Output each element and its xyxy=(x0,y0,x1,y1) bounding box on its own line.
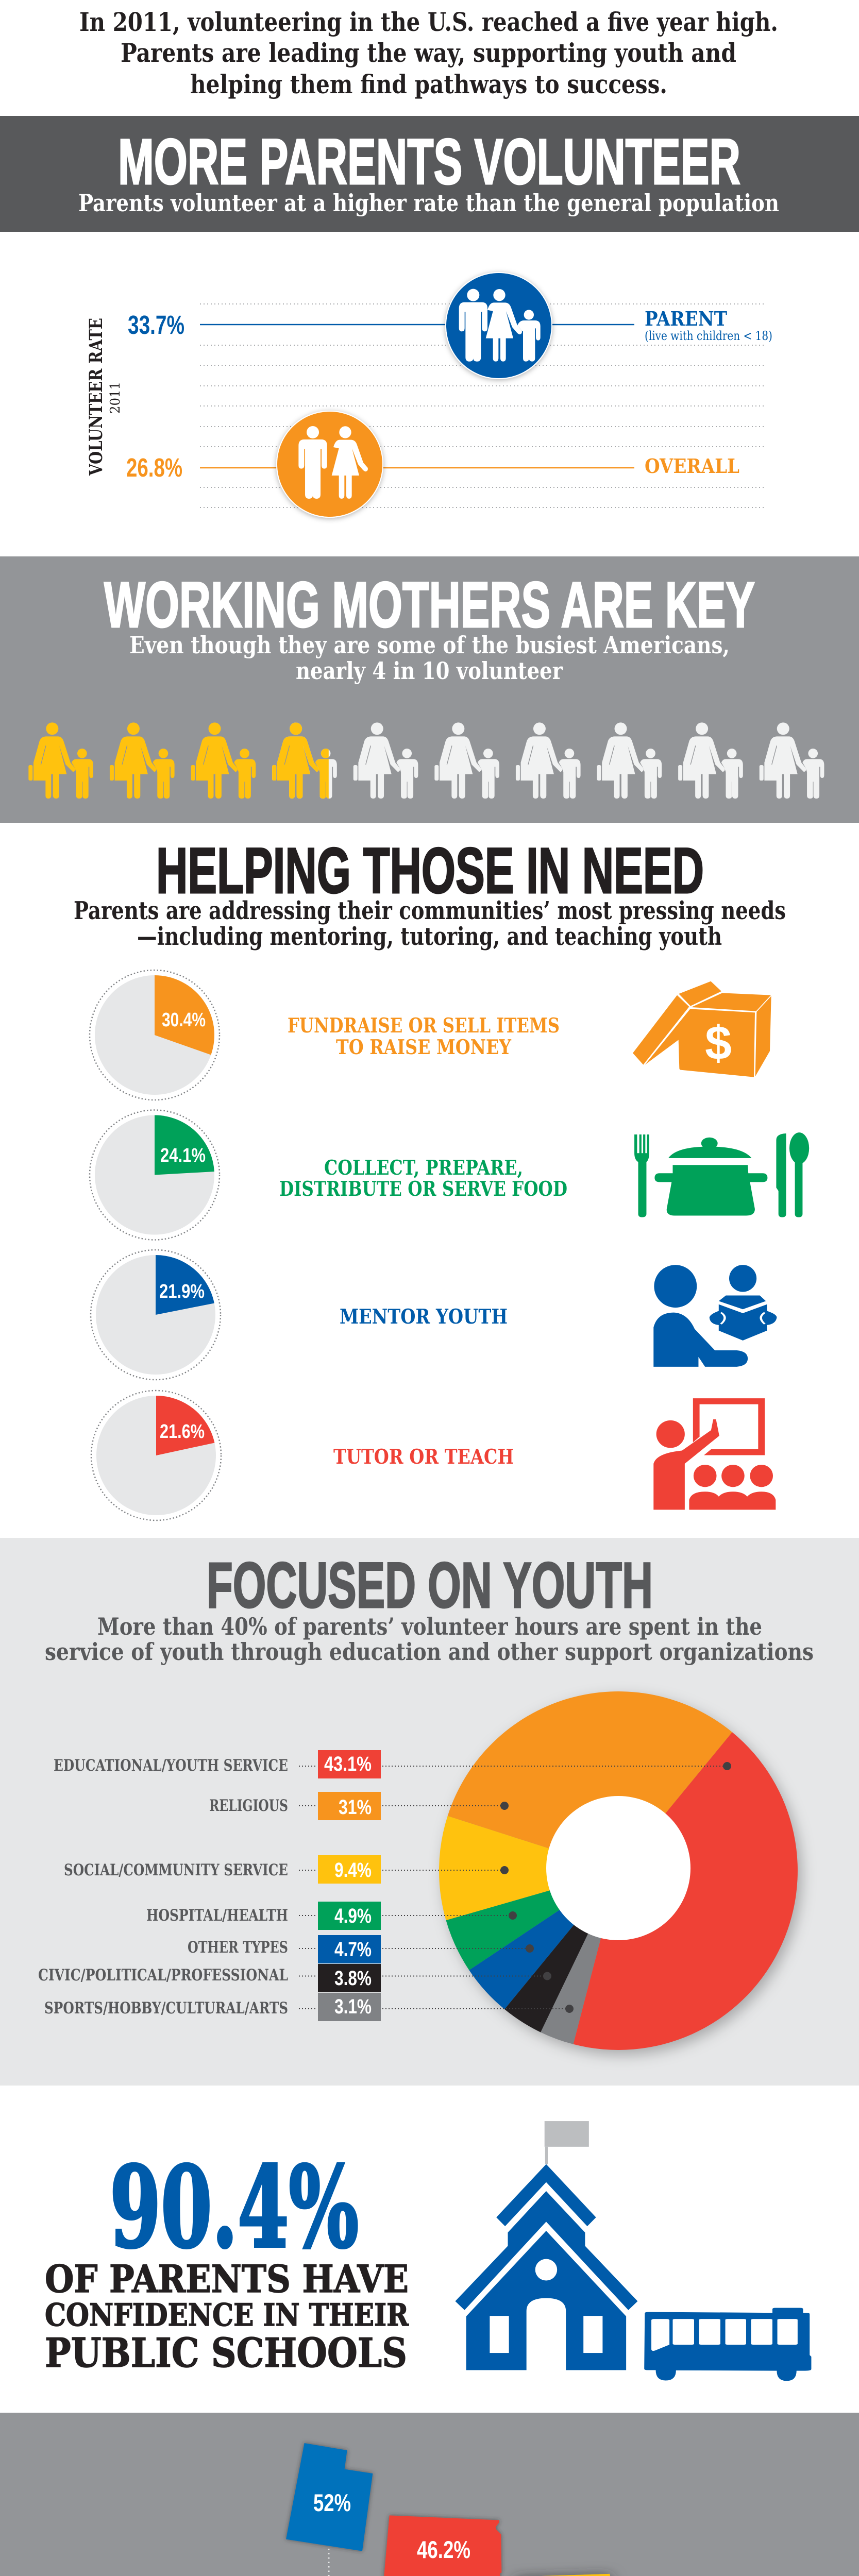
pie: fundraise 30.4% xyxy=(90,970,220,1100)
panel: more parents volunteer banner xyxy=(0,116,859,232)
pie: tutor 21.6%: 21.6% xyxy=(160,1421,205,1443)
legend: educational/youth service: 43.1% xyxy=(324,1753,372,1775)
icon: pot and cutlery xyxy=(634,1132,809,1217)
pie: mentor 21.9% xyxy=(91,1250,221,1380)
icon: teacher and students xyxy=(653,1398,776,1510)
subheading: nearly 4 in 10 volunteer xyxy=(296,657,563,685)
state: South Dakota xyxy=(384,2515,501,2576)
parent label: PARENT xyxy=(645,307,727,330)
legend: sports/hobby/cultural/arts xyxy=(44,1993,381,2021)
label: fundraise xyxy=(288,1014,560,1059)
panel: public school confidence xyxy=(45,2121,811,2381)
statement text: OF PARENTS HAVE xyxy=(45,2257,409,2301)
icon: overall couple circle xyxy=(276,411,383,518)
donut chart xyxy=(439,1691,798,2050)
connector lines xyxy=(282,2549,859,2576)
subheading xyxy=(129,631,730,685)
legend: educational/youth service xyxy=(54,1750,381,1778)
legend leader lines xyxy=(299,1762,731,2013)
panel: helping those in need xyxy=(74,835,809,1520)
icon: money box xyxy=(633,981,771,1077)
axis label: 2011 xyxy=(108,382,123,414)
statement text xyxy=(45,2257,409,2377)
intro text: helping them find pathways to success. xyxy=(190,69,667,99)
legend: civic/political/professional: 3.8% xyxy=(334,1967,372,1990)
legend: social/community service: 9.4% xyxy=(334,1859,372,1882)
pie: mentor 21.9%: 21.9% xyxy=(159,1281,205,1302)
legend: civic/political/professional xyxy=(38,1964,381,1992)
legend: religious: RELIGIOUS xyxy=(209,1797,288,1815)
icon: mentor and child xyxy=(653,1265,777,1367)
label: food: DISTRIBUTE OR SERVE FOOD xyxy=(279,1177,567,1201)
statement text: PUBLIC SCHOOLS xyxy=(45,2330,407,2377)
panel: working mothers xyxy=(0,556,859,823)
state: Iowa xyxy=(515,2574,630,2576)
pie: tutor 21.6% xyxy=(91,1391,221,1520)
subheading: —including mentoring, tutoring, and teaching youth xyxy=(137,922,722,951)
pictogram: 4 in 10 mothers xyxy=(28,722,824,799)
parent label xyxy=(645,307,772,343)
subheading xyxy=(74,896,786,951)
icon: school xyxy=(455,2121,637,2370)
pie: fundraise 30.4%: 30.4% xyxy=(162,1009,206,1031)
axis label: VOLUNTEER RATE xyxy=(86,318,107,476)
panel: top 5 states xyxy=(0,2413,859,2576)
panel: focused on youth xyxy=(0,1538,859,2086)
legend: religious xyxy=(209,1792,381,1820)
intro text: Parents are leading the way, supporting youth and xyxy=(121,38,736,68)
legend: hospital/health xyxy=(146,1902,381,1930)
legend: social/community service xyxy=(64,1855,381,1884)
heading: FOCUSED ON YOUTH xyxy=(207,1550,653,1621)
legend: social/community service: SOCIAL/COMMUNITY SERVICE xyxy=(64,1861,288,1879)
legend: religious: 31% xyxy=(339,1796,372,1819)
state: Utah: 52% xyxy=(313,2489,351,2516)
legend: sports/hobby/cultural/arts: 3.1% xyxy=(334,1995,372,2018)
big stat: 90.4% xyxy=(110,2142,359,2273)
icon: parent family circle xyxy=(445,272,552,379)
legend: other types: OTHER TYPES xyxy=(188,1938,288,1957)
axis label xyxy=(86,318,123,476)
intro text xyxy=(79,7,778,99)
label: fundraise: TO RAISE MONEY xyxy=(336,1036,512,1059)
legend: educational/youth service: EDUCATIONAL/YOUTH SERVICE xyxy=(54,1756,288,1775)
subheading xyxy=(45,1613,814,1666)
label: food xyxy=(279,1156,567,1201)
legend: sports/hobby/cultural/arts: SPORTS/HOBBY/CULTURAL/ARTS xyxy=(44,1999,288,2018)
pie: food 24.1%: 24.1% xyxy=(160,1145,206,1166)
legend: hospital/health: HOSPITAL/HEALTH xyxy=(146,1906,288,1925)
label: tutor: TUTOR OR TEACH xyxy=(333,1445,514,1469)
overall value: 26.8% xyxy=(126,453,182,482)
legend: civic/political/professional: CIVIC/POLITICAL/PROFESSIONAL xyxy=(38,1966,288,1985)
parent label: (live with children < 18) xyxy=(645,329,772,343)
statement text: CONFIDENCE IN THEIR xyxy=(45,2297,409,2333)
state: Utah xyxy=(286,2443,373,2551)
parent value: 33.7% xyxy=(128,310,184,340)
label: food: COLLECT, PREPARE, xyxy=(324,1156,523,1180)
label: mentor: MENTOR YOUTH xyxy=(340,1305,508,1329)
legend: other types: 4.7% xyxy=(334,1938,372,1961)
icon: school bus xyxy=(644,2308,811,2381)
icon: money box: $ xyxy=(705,1016,732,1070)
pie: food 24.1% xyxy=(90,1110,220,1240)
subheading: Even though they are some of the busiest Americans, xyxy=(129,631,730,659)
legend: hospital/health: 4.9% xyxy=(334,1905,372,1927)
chart: volunteer rate xyxy=(86,272,772,518)
state: South Dakota: 46.2% xyxy=(417,2536,470,2563)
label: fundraise: FUNDRAISE OR SELL ITEMS xyxy=(288,1014,560,1038)
legend: other types xyxy=(188,1935,381,1963)
overall label: OVERALL xyxy=(645,454,739,478)
